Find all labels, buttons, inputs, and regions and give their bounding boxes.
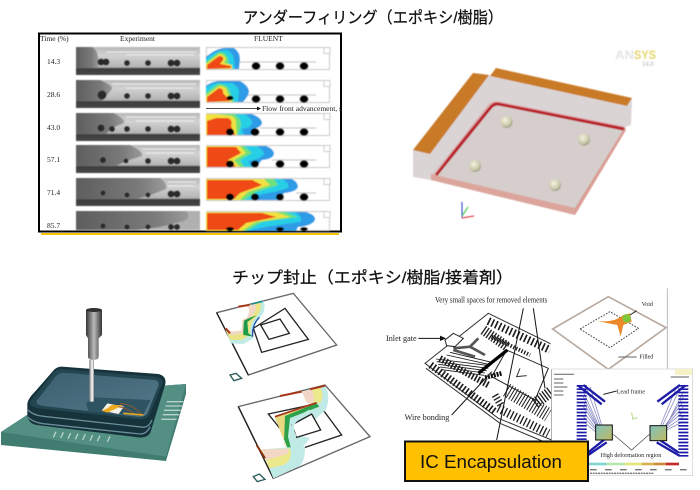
panel: wire bonding package diagram	[425, 313, 552, 445]
time labels	[47, 57, 60, 230]
ANSYS logo: AN	[615, 48, 634, 62]
column headings	[40, 34, 283, 43]
walls	[413, 73, 632, 215]
time labels: 43.0	[47, 123, 60, 132]
panel: flow contour plan 1	[217, 293, 337, 381]
panel: void diagram	[551, 288, 667, 369]
ANSYS logo: SYS	[634, 48, 656, 62]
panel: wire bonding callouts and labels: Inlet gate	[386, 333, 417, 343]
inner chip	[292, 414, 321, 437]
leads	[431, 321, 551, 433]
floor	[431, 103, 625, 208]
red flow front	[434, 102, 624, 175]
well	[86, 397, 151, 416]
ANSYS logo: 14.0	[642, 62, 654, 68]
flow front arrow	[206, 104, 342, 113]
time labels: 57.1	[47, 155, 60, 164]
FLUENT heat maps	[206, 48, 330, 231]
axes icon	[462, 202, 474, 218]
title: underfill: アンダーフィリング（エポキシ/樹脂）	[243, 9, 503, 27]
panel: void diagram: Void	[642, 302, 653, 308]
lower stream	[262, 447, 305, 478]
panel: void diagram: Filled	[639, 355, 653, 361]
panel: experiment vs FLUENT comparison	[39, 34, 342, 235]
flow front arrow: Flow front advancement, s	[262, 104, 342, 113]
title: chip encapsulation: チップ封止（エポキシ/樹脂/接着剤）	[232, 269, 513, 287]
callout: IC Encapsulation: IC Encapsulation	[420, 452, 562, 472]
orange top left	[413, 73, 489, 154]
time labels: 28.6	[47, 90, 60, 99]
column headings: FLUENT	[254, 34, 283, 43]
callout: IC Encapsulation	[405, 442, 588, 481]
needle	[86, 308, 102, 402]
package body	[425, 313, 552, 440]
deformed paddles	[596, 425, 612, 440]
middle stream	[275, 403, 325, 450]
panel: ANSYS 3D underfill model	[413, 48, 656, 218]
experiment photo strips	[76, 47, 200, 230]
panel: dispensing needle illustration	[1, 308, 186, 461]
tray inner face	[36, 373, 159, 417]
panel: lead frame deformation	[552, 369, 693, 476]
time labels: 14.3	[47, 57, 60, 66]
runner	[453, 338, 485, 357]
panel: wire bonding callouts and labels: Wire bonding	[405, 412, 450, 422]
panel: lead frame deformation: High deformation region	[601, 452, 662, 459]
tray stack	[27, 367, 166, 437]
time labels: 85.7	[47, 221, 60, 230]
color legend	[588, 463, 688, 473]
green substrate	[1, 384, 186, 461]
ANSYS logo	[615, 48, 656, 68]
chip marker	[517, 368, 527, 377]
flow on chip	[102, 403, 143, 415]
tray rim	[30, 369, 162, 419]
top stream	[302, 386, 328, 412]
blue lead fingers	[567, 385, 597, 457]
substrate edge	[431, 174, 575, 215]
flow bands	[225, 301, 265, 344]
panel: wire bonding callouts and labels	[386, 295, 548, 440]
solder balls	[469, 116, 590, 191]
panel: wire bonding callouts and labels: Very small spaces for removed elements	[435, 295, 548, 305]
time labels: 71.4	[47, 188, 60, 197]
panel: lead frame deformation: Lead frame	[617, 389, 645, 396]
column headings: Experiment	[120, 34, 156, 43]
orange top right	[490, 68, 632, 106]
column headings: Time (%)	[40, 34, 69, 43]
lead wires fan	[583, 387, 683, 432]
panel: flow contour plan 2	[238, 385, 370, 482]
